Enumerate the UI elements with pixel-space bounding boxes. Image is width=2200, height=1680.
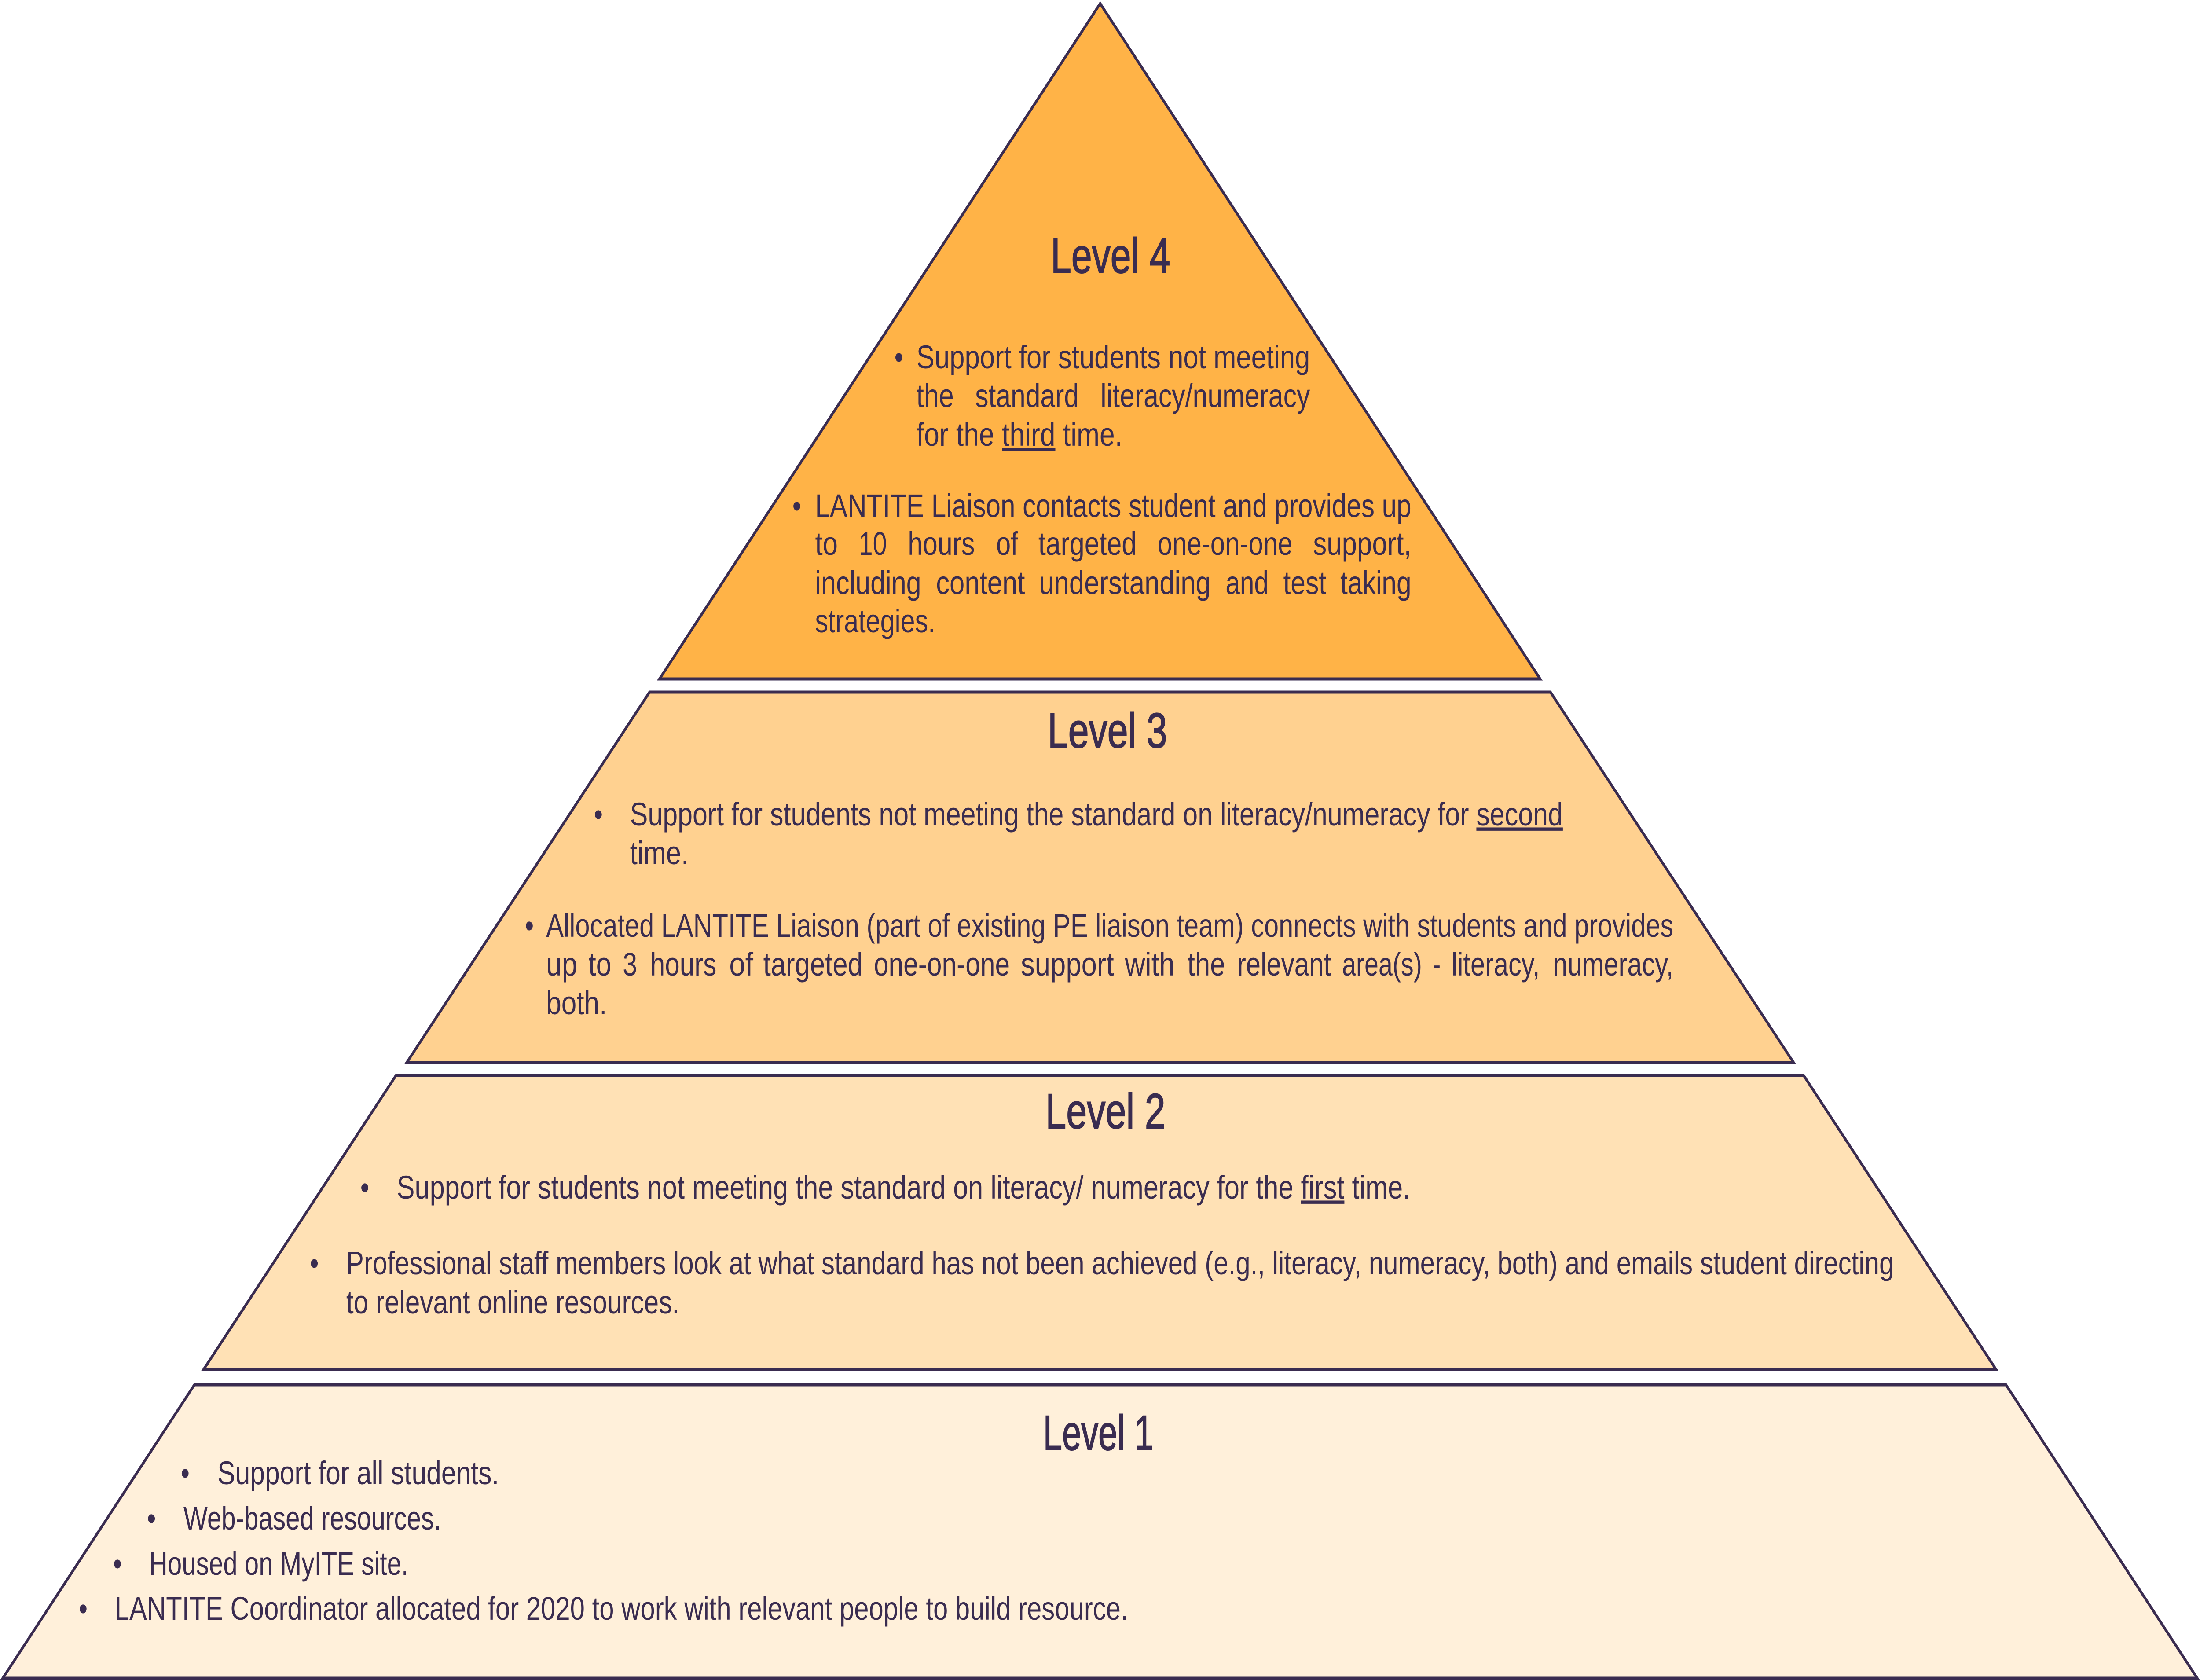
bullet text: level 3 second point: support — [1021, 946, 1114, 983]
bullet text: level 4 second point: content — [936, 565, 1025, 602]
bullet text: level 4 first point: • — [895, 339, 903, 376]
bullet text: level 4 second point: of — [996, 526, 1018, 562]
bullet text: level 3 second point: both. — [546, 985, 607, 1022]
bullet text: level 3 second point: hours — [650, 946, 716, 983]
bullet text: level 4 first point — [895, 339, 1310, 453]
bullet text: level 4 first point: literacy/numeracy — [1100, 378, 1310, 414]
bullet text: LANTITE coordinator: LANTITE Coordinator allocated for 2020 to work with relevant people to build resource. — [115, 1591, 1128, 1627]
heading: level 2: Level 2 — [1045, 1084, 1166, 1139]
bullet text: level 3 first point: Support for students not meeting the standard on literacy/numeracy for second — [630, 796, 1563, 833]
bullet text: level 3 second point: 3 — [623, 946, 637, 983]
bullet text: level 2 first point: • — [360, 1170, 369, 1206]
panel: level 3 — [407, 692, 1794, 1063]
bullet text: level 4 first point: standard — [975, 378, 1079, 414]
bullet text: level 4 second point: hours — [908, 526, 975, 562]
bullet text: level 3 first point: time. — [630, 835, 689, 872]
bullet text: level 4 second point: strategies. — [815, 603, 935, 640]
heading: level 4: Level 4 — [1051, 229, 1170, 284]
bullet text: level 3 second point: up — [546, 946, 577, 983]
bullet text: level 3 second point: to — [588, 946, 612, 983]
bullet text: level 2 second point: • — [310, 1245, 319, 1282]
bullet text: level 3 second point: area(s) — [1342, 946, 1422, 983]
panel: level 1 — [3, 1385, 2197, 1678]
bullet text: support for all students: • — [181, 1455, 190, 1492]
bullet text: housed on MyITE site: • — [113, 1546, 122, 1582]
heading: level 3: Level 3 — [1048, 704, 1167, 759]
bullet text: level 4 first point: for the third time. — [917, 417, 1122, 453]
bullet text: level 4 second point: targeted — [1038, 526, 1137, 562]
panel: level 2 — [204, 1075, 1996, 1369]
bullet text: level 4 second point: 10 — [859, 526, 887, 562]
bullet text: housed on MyITE site: Housed on MyITE site. — [149, 1546, 408, 1582]
bullet text: level 2 second point: to relevant online resources. — [346, 1284, 679, 1321]
bullet text: level 3 second point: - — [1434, 946, 1441, 983]
bullet text: level 3 second point — [525, 908, 1673, 1022]
bullet text: level 3 first point: • — [594, 796, 603, 833]
heading: level 1: Level 1 — [1043, 1406, 1153, 1461]
bullet text: level 3 second point: numeracy, — [1553, 946, 1673, 983]
bullet text: level 4 second point: to — [815, 526, 838, 562]
bullet text: level 4 second point — [792, 488, 1412, 640]
bullet text: web-based resources: • — [147, 1500, 156, 1537]
bullet text: level 3 second point: of — [729, 946, 753, 983]
bullet text: level 3 second point: • — [525, 908, 534, 944]
bullet text: level 2 first point: Support for students not meeting the standard on literacy/ numeracy for the first time. — [397, 1170, 1410, 1206]
bullet text: level 3 second point: targeted — [763, 946, 863, 983]
bullet text: level 3 second point: literacy, — [1452, 946, 1540, 983]
panel: level 4 — [660, 4, 1540, 679]
bullet text: level 4 second point: and — [1225, 565, 1269, 602]
bullet text: level 4 second point: taking — [1340, 565, 1412, 602]
bullet text: level 4 second point: test — [1283, 565, 1326, 602]
bullet text: level 4 second point: LANTITE Liaison contacts student and provides up — [815, 488, 1412, 525]
bullet text: level 4 second point: understanding — [1039, 565, 1211, 602]
bullet text: level 3 first point — [594, 796, 1563, 872]
bullet text: level 3 second point: one-on-one — [874, 946, 1010, 983]
bullet text: support for all students: Support for all students. — [217, 1455, 499, 1492]
bullet text: level 4 first point: Support for students not meeting — [917, 339, 1310, 376]
bullet text: level 4 first point: the — [917, 378, 954, 414]
bullet text: LANTITE coordinator: • — [79, 1591, 88, 1627]
bullet text: level 3 second point: Allocated LANTITE Liaison (part of existing PE liaison team) connects with students and provides — [546, 908, 1673, 944]
bullet text: level 3 second point: relevant — [1237, 946, 1331, 983]
bullet text: level 2 second point: Professional staff members look at what standard has not been achieved (e.g., literacy, numeracy, both) and emails student directing — [346, 1245, 1894, 1282]
bullet text: level 4 second point: • — [792, 488, 801, 525]
bullet text: level 4 second point: support, — [1313, 526, 1412, 562]
bullet text: level 4 second point: one-on-one — [1158, 526, 1293, 562]
bullet text: web-based resources: Web-based resources. — [183, 1500, 441, 1537]
bullet text: level 3 second point: the — [1188, 946, 1225, 983]
bullet text: level 4 second point: including — [815, 565, 921, 602]
bullet text: level 2 second point — [310, 1245, 1894, 1321]
bullet text: level 3 second point: with — [1125, 946, 1175, 983]
